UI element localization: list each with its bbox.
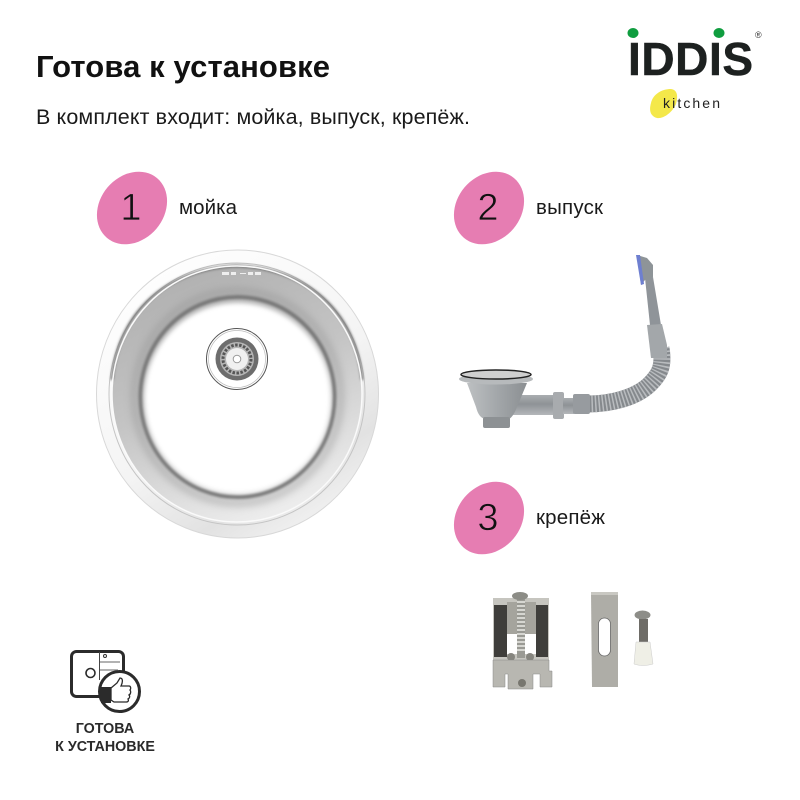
drain flange	[459, 374, 533, 384]
fastener clip	[493, 592, 552, 689]
step 1 marker	[82, 158, 182, 258]
title: Готова к установке	[36, 49, 330, 84]
logo: IDDIS kitchen: kitchen	[663, 95, 720, 111]
badge caption	[55, 721, 155, 755]
step 2 marker: 2	[477, 187, 499, 229]
sink image	[96, 250, 378, 538]
subtitle text: В комплект входит: мойка, выпуск, крепёж.	[36, 105, 470, 129]
step 3 label: крепёж	[536, 506, 605, 529]
step 3 marker: 3	[477, 497, 499, 539]
icon: thumbs up	[101, 678, 131, 703]
badge icon: ready to install	[72, 652, 140, 712]
overflow tube	[645, 277, 661, 325]
fastener screw	[634, 610, 653, 666]
step 2 label: выпуск	[536, 196, 604, 219]
step 1 label: мойка	[179, 196, 238, 219]
logo: IDDIS kitchen: ®	[755, 30, 762, 40]
drain kit image	[459, 255, 667, 428]
drain body	[467, 383, 527, 419]
badge caption: ГОТОВА	[76, 721, 134, 737]
horizontal pipe	[510, 395, 555, 415]
fastener plate	[591, 592, 618, 687]
step 1 marker: 1	[120, 187, 142, 229]
badge caption: К УСТАНОВКЕ	[55, 739, 155, 755]
logo: IDDIS kitchen: IDDIS	[628, 33, 753, 85]
step 2 marker	[439, 158, 539, 258]
corrugated hose	[588, 348, 662, 404]
blue tip	[636, 255, 644, 285]
step 3 marker	[439, 468, 539, 568]
overflow marks	[222, 272, 261, 275]
logo: IDDIS kitchen	[628, 28, 762, 118]
drain	[206, 328, 268, 390]
